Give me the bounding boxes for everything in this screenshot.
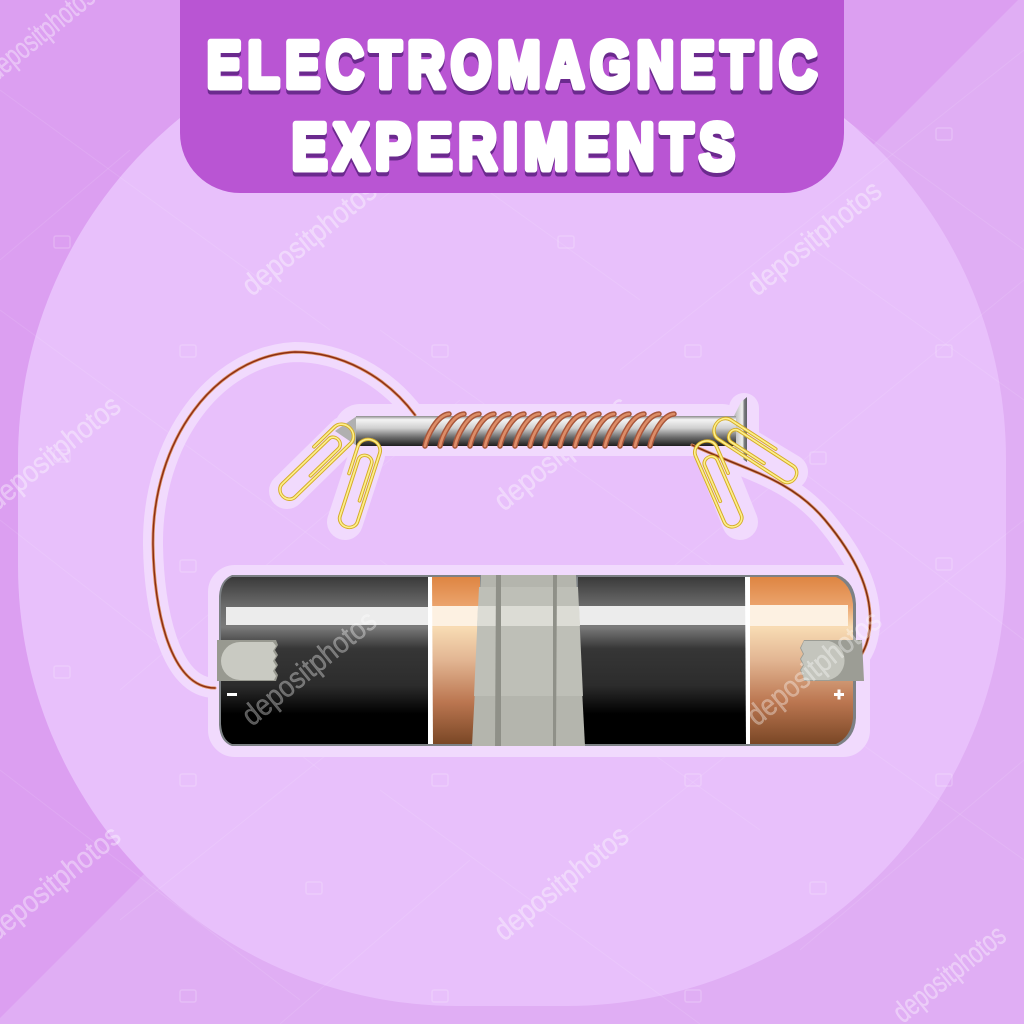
- left wire: [153, 352, 415, 688]
- right tape: [800, 640, 864, 681]
- sticker halo behind artwork: [153, 352, 870, 746]
- nail shaft: [356, 416, 736, 446]
- battery white dividers: [428, 577, 750, 744]
- minus sign: [227, 693, 237, 696]
- paperclip: right upper: [710, 414, 803, 486]
- title line 2: EXPERIMENTS: [292, 110, 741, 183]
- battery: [217, 575, 864, 746]
- paperclip: left outer: [273, 420, 358, 503]
- title banner: [180, 0, 844, 193]
- watermark: repeated wordmark behind the artwork: depositphotos: [488, 389, 635, 517]
- title line 2 shadow: EXPERIMENTS: [292, 114, 741, 187]
- watermark: repeated wordmark behind the artwork: depositphotos: [236, 174, 383, 302]
- centre tape: [472, 575, 585, 746]
- copper coil: [425, 414, 674, 446]
- paperclip: right lower: [691, 437, 749, 530]
- battery black body: [221, 577, 748, 744]
- nail: [335, 397, 747, 462]
- watermark: wordmarks over battery: depositphotos: [741, 604, 888, 732]
- right wire: [692, 445, 870, 660]
- watermark: wordmarks over battery: depositphotos: [236, 604, 383, 732]
- watermark: repeated wordmark behind the artwork: depositphotos: [488, 819, 635, 947]
- nail head: [734, 397, 747, 462]
- watermark: repeated wordmark behind the artwork: depositphotos: [741, 174, 888, 302]
- battery highlight band: [226, 605, 848, 626]
- paperclip: left inner: [333, 436, 383, 530]
- watermark: wordmarks over battery: [236, 604, 888, 732]
- nail tip: [335, 416, 357, 446]
- plus sign: [834, 690, 844, 700]
- watermark: camera icons: [54, 128, 952, 1002]
- title line 1: ELECTROMAGNETIC: [207, 28, 823, 101]
- battery outline: [219, 575, 856, 746]
- battery copper body: [430, 577, 853, 744]
- left tape: [217, 640, 278, 681]
- title line 1 shadow: ELECTROMAGNETIC: [207, 32, 823, 105]
- title: [207, 28, 823, 187]
